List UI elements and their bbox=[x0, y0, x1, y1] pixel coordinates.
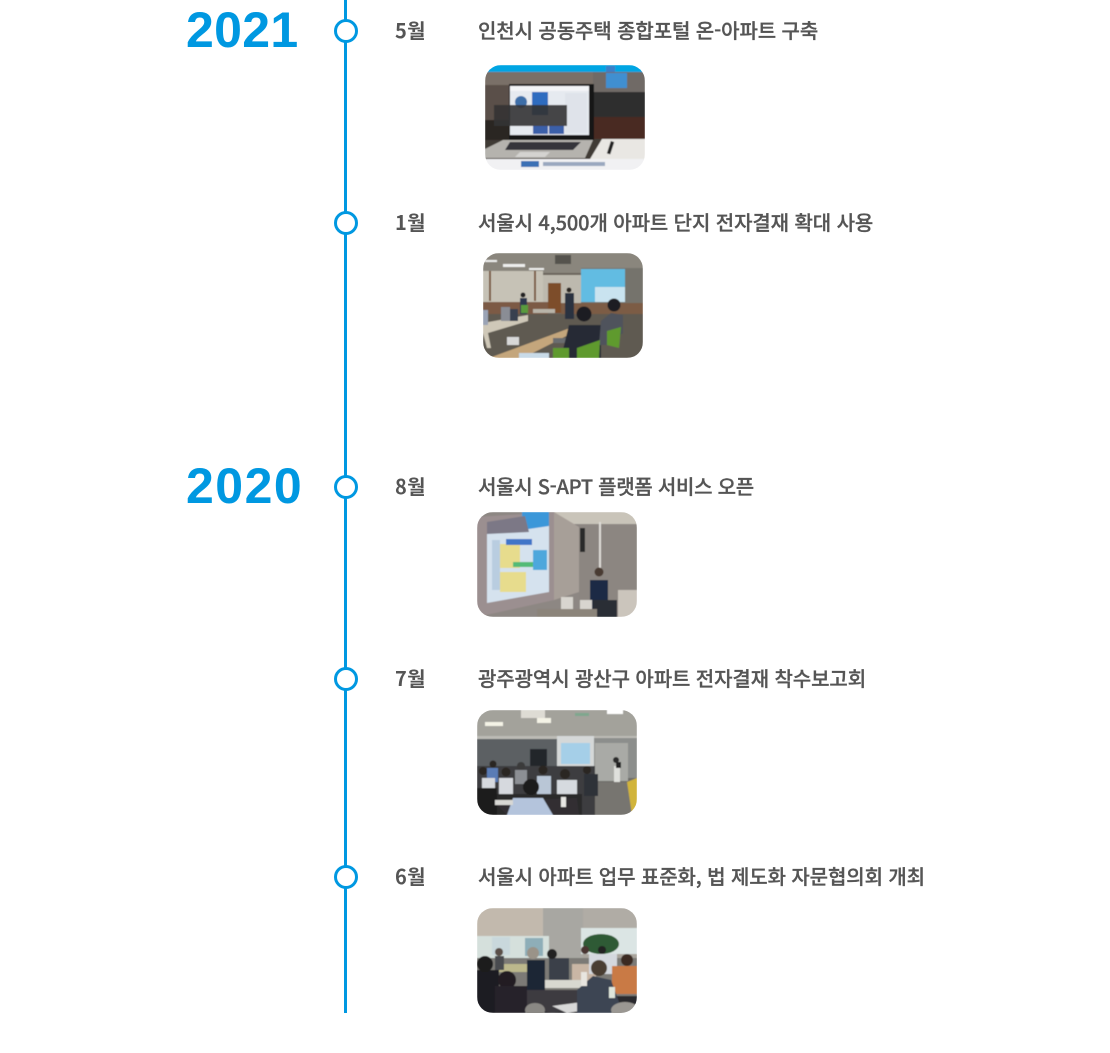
month: 1월: 1월 bbox=[395, 207, 426, 236]
photo: audience in seminar room bbox=[477, 710, 637, 815]
month: 5월: 5월 bbox=[395, 15, 426, 44]
marker: 2020 June bbox=[334, 865, 358, 889]
photo: advisory council attendees bbox=[477, 908, 637, 1013]
photo: presenter and projection bbox=[477, 512, 637, 617]
marker: 2021 January bbox=[334, 211, 358, 235]
photo: portal on laptop bbox=[485, 65, 645, 170]
event: 2021 May: 인천시 공동주택 종합포털 온-아파트 구축 bbox=[478, 15, 818, 44]
photo: meeting room bbox=[483, 253, 643, 358]
month: 8월: 8월 bbox=[395, 471, 426, 500]
timeline line bbox=[344, 0, 347, 1013]
marker: 2020 August bbox=[334, 475, 358, 499]
year 2020: 2020 bbox=[186, 458, 303, 514]
event: 2020 July: 광주광역시 광산구 아파트 전자결재 착수보고회 bbox=[478, 663, 866, 692]
year 2021: 2021 bbox=[186, 2, 298, 58]
marker: 2020 July bbox=[334, 667, 358, 691]
marker: 2021 May bbox=[334, 19, 358, 43]
event: 2020 June: 서울시 아파트 업무 표준화, 법 제도화 자문협의회 개최 bbox=[478, 861, 925, 890]
event: 2020 August: 서울시 S-APT 플랫폼 서비스 오픈 bbox=[478, 471, 754, 500]
event: 2021 January: 서울시 4,500개 아파트 단지 전자결재 확대 사용 bbox=[478, 207, 873, 236]
month: 6월: 6월 bbox=[395, 861, 426, 890]
month: 7월: 7월 bbox=[395, 663, 426, 692]
